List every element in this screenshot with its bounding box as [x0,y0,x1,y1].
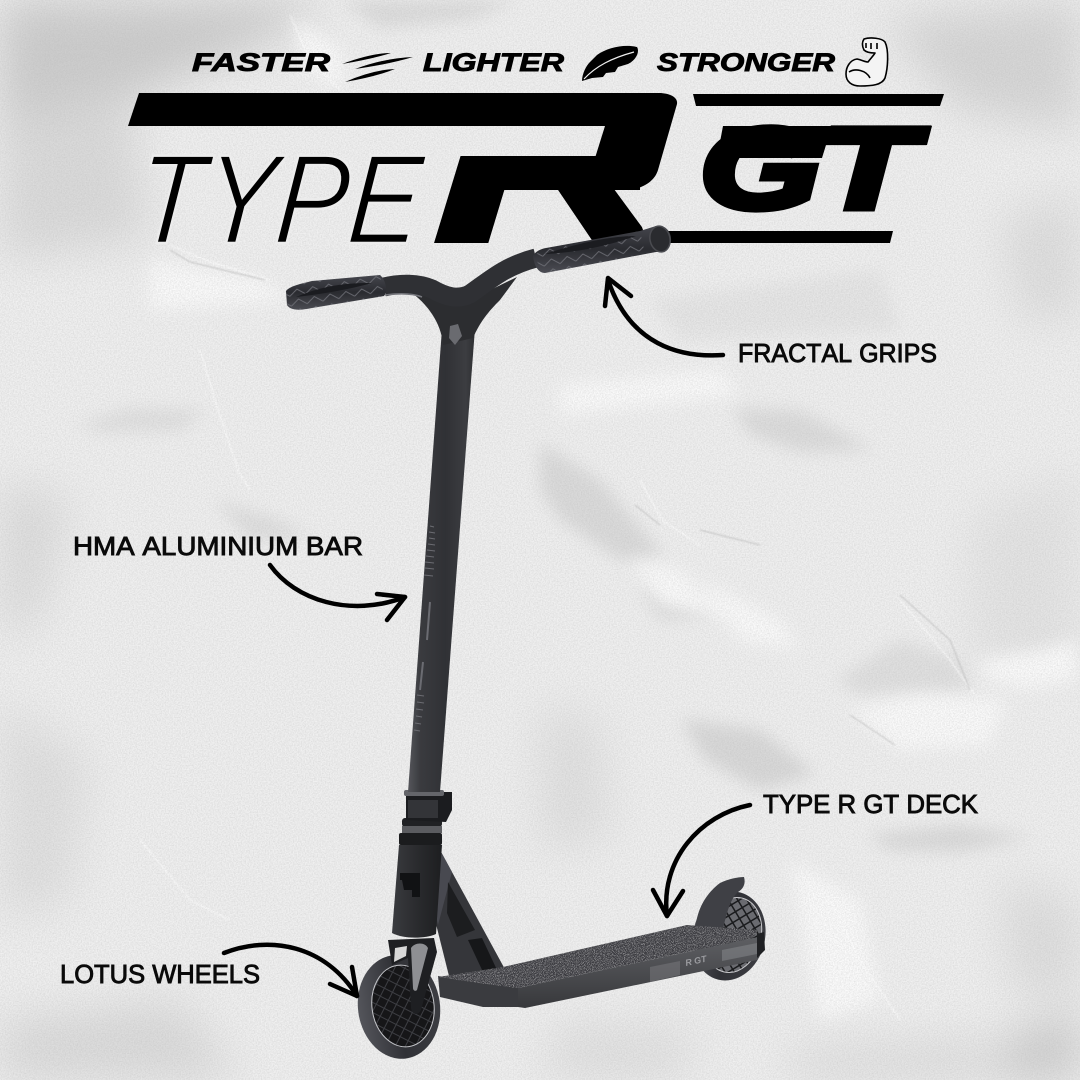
head tube [392,845,442,938]
label: lotus wheels: LOTUS WHEELS [60,959,260,989]
arrow: to bar [270,565,405,620]
icon: flexed bicep [846,38,888,86]
deck grip tape [438,925,758,988]
stem decal [414,526,435,731]
t-bar stem [408,315,476,792]
deck rear end [757,932,765,958]
scooter [286,224,775,1064]
bar crossbar [384,258,536,345]
logo bar: gt top rule [693,94,944,106]
logo bar: r top stroke [128,93,640,126]
deck nose underside [438,976,518,1007]
logo bar: r shoulder [585,93,677,190]
header strapline [192,38,888,86]
icon: feather [582,46,638,81]
logo bar: gt bottom rule [660,231,893,243]
headset and clamp [399,790,452,845]
label: type r gt deck: TYPE R GT DECK [763,789,979,819]
deck side: R GT [684,953,709,968]
text: type: TYPE [132,128,430,270]
deck side [518,937,763,1008]
fork [388,938,437,1014]
callout: hma aluminium bar [73,531,405,620]
text: big r: R [432,49,672,286]
logo: type r gt [128,93,944,244]
callout: type r gt deck [653,789,979,916]
arrow: to grips [605,278,723,355]
arrow: to deck [653,805,750,916]
rear wheel [683,884,775,988]
left grip [286,275,386,310]
front wheel [351,950,447,1064]
icon: speed slashes [342,53,413,82]
logo bar: gt upper stroke [717,126,932,158]
callout: lotus wheels [60,945,357,996]
label: fractal grips: FRACTAL GRIPS [738,338,937,368]
callout: fractal grips [605,278,937,368]
text: gt: GT [700,105,927,233]
neck and gusset [434,850,507,980]
text: stronger: STRONGER [657,49,835,77]
rear fender [695,877,745,934]
logo bar: r middle stroke [459,156,640,190]
head tube logo [400,873,420,897]
label: hma aluminium bar: HMA ALUMINIUM BAR [73,531,363,561]
text: faster: FASTER [192,49,330,77]
text: lighter: LIGHTER [423,49,564,77]
arrow: to wheel [224,945,357,996]
right grip [533,224,672,273]
